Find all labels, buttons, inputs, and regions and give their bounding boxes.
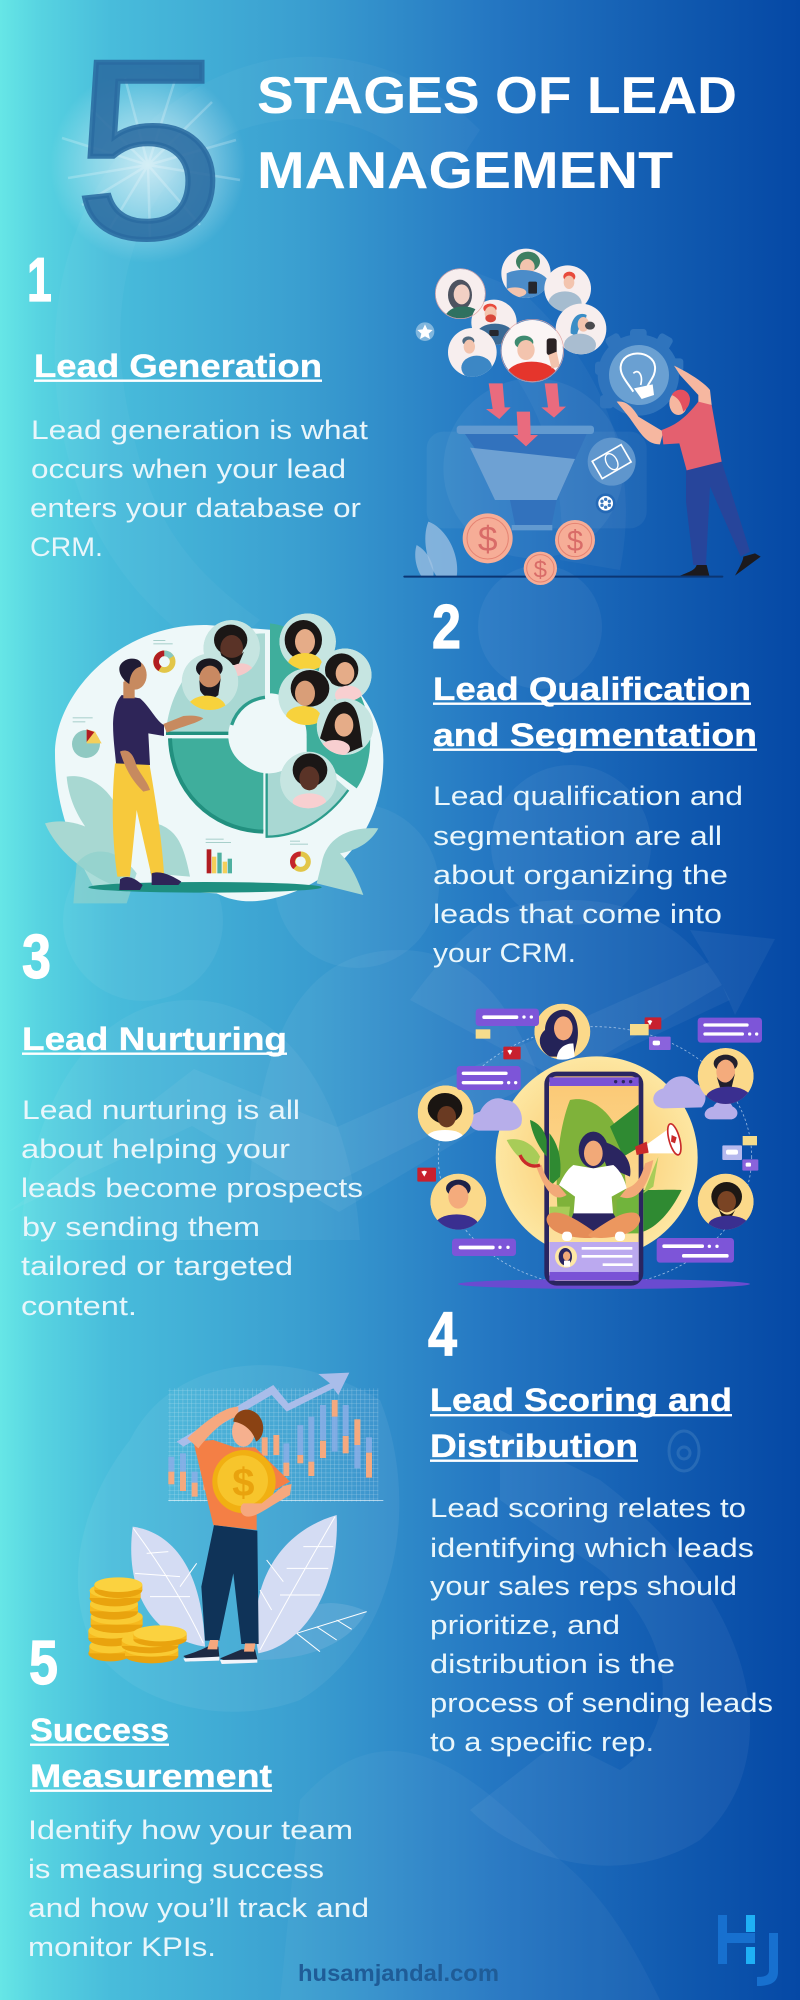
body text 3: about helping your	[21, 1134, 290, 1164]
plant leaves	[131, 1515, 337, 1653]
number 4: 4	[428, 1300, 457, 1369]
body text 1: occurs when your lead	[31, 454, 346, 484]
leaves	[415, 522, 457, 577]
people in pie	[182, 613, 373, 810]
gear and bulb	[595, 329, 683, 416]
footer website: husamjandal.com	[298, 1960, 499, 1986]
lower leaf	[257, 1603, 367, 1660]
body text 2: leads that come into	[433, 899, 722, 929]
man holding coin: $	[232, 1461, 254, 1505]
megaphone and red cord	[520, 1122, 684, 1166]
title: MANAGEMENT	[257, 142, 673, 200]
body text 2: Lead qualification and	[433, 781, 743, 811]
body text 4: Lead scoring relates to	[430, 1493, 746, 1523]
sun circle	[496, 1056, 698, 1258]
heading: lead qualification: and Segmentation	[433, 717, 757, 753]
seated woman	[535, 1132, 653, 1241]
number 3: 3	[22, 923, 51, 992]
film dot badge	[596, 493, 616, 513]
logo: HJ	[718, 1915, 778, 1986]
chart grid	[168, 1388, 383, 1502]
body text 4: distribution is the	[430, 1649, 675, 1679]
body text 4: prioritize, and	[430, 1610, 620, 1640]
presenting man	[113, 659, 203, 890]
heading: success measurement: Measurement	[30, 1758, 272, 1794]
dollar coins: $	[478, 520, 498, 559]
body text 3: content.	[21, 1291, 137, 1321]
number 1: 1	[27, 246, 52, 315]
heading: success measurement	[30, 1712, 272, 1794]
body text 1: CRM.	[30, 532, 103, 562]
title: STAGES OF LEAD	[257, 67, 737, 125]
chat bubbles	[452, 1009, 762, 1263]
title	[257, 67, 737, 200]
section 5: success measurement	[28, 1629, 369, 1962]
dollar coins: $	[534, 556, 547, 583]
heading: lead nurturing: Lead Nurturing	[22, 1021, 287, 1057]
body text 2	[433, 781, 743, 968]
body text 3: Lead nurturing is all	[22, 1095, 300, 1125]
number 5: 5	[29, 1629, 58, 1698]
heading: lead qualification: Lead Qualification	[433, 671, 751, 707]
section 1: lead generation	[27, 246, 369, 562]
white blob	[55, 625, 383, 901]
star badge	[416, 322, 434, 341]
body text 3: tailored or targeted	[21, 1251, 293, 1281]
heading: lead scoring: Lead Scoring and	[430, 1382, 732, 1418]
big number 5 with glow: 5	[74, 7, 224, 291]
body text 5: and how you’ll track and	[28, 1893, 369, 1923]
body text 4: your sales reps should	[430, 1571, 737, 1601]
coin stacks	[88, 1577, 187, 1663]
ground line	[403, 576, 723, 578]
body text 4: identifying which leads	[430, 1533, 754, 1563]
body text 2: segmentation are all	[433, 821, 722, 851]
people circles	[435, 248, 607, 388]
man holding coin	[183, 1407, 292, 1664]
funnel	[457, 426, 594, 530]
body text 3: leads become prospects	[21, 1173, 363, 1203]
ground	[88, 882, 322, 893]
candlesticks	[168, 1400, 372, 1497]
icon: faint threads logo	[669, 1431, 699, 1471]
ground	[458, 1279, 750, 1289]
body text 5: monitor KPIs.	[28, 1932, 216, 1962]
heading: lead scoring: Distribution	[430, 1428, 638, 1464]
pie chart	[166, 623, 370, 837]
body text 4: process of sending leads	[430, 1688, 773, 1718]
body text 1: enters your database or	[30, 493, 361, 523]
body text 3: by sending them	[22, 1212, 260, 1242]
heading: lead scoring	[430, 1382, 732, 1464]
money badge	[588, 438, 636, 486]
body text 5: Identify how your team	[28, 1815, 353, 1845]
body text 4: to a specific rep.	[430, 1727, 654, 1757]
illustration: social phone	[417, 1004, 762, 1289]
illustration: segmentation pie	[45, 613, 383, 903]
heading: lead generation: Lead Generation	[34, 348, 322, 384]
illustration: lead funnel	[403, 248, 761, 585]
body text 2: your CRM.	[433, 938, 576, 968]
small charts	[72, 640, 308, 873]
section 3: lead nurturing	[21, 923, 363, 1321]
body text 5	[28, 1815, 369, 1962]
section 2: lead qualification and segmentation	[432, 593, 757, 968]
leaves	[45, 776, 378, 903]
clouds	[470, 1076, 737, 1131]
number 2: 2	[432, 593, 461, 662]
body text 3	[21, 1095, 363, 1321]
dollar coins	[463, 513, 595, 585]
body text 1	[30, 415, 369, 562]
section 4: lead scoring and distribution	[428, 1300, 773, 1757]
notification icons	[417, 1017, 758, 1182]
heading: success measurement: Success	[30, 1712, 169, 1748]
growth arrow	[177, 1373, 349, 1447]
dotted orbit	[438, 1027, 752, 1287]
heading: lead qualification	[433, 671, 757, 753]
phone	[507, 1074, 682, 1283]
body text 2: about organizing the	[433, 860, 728, 890]
body text 5: is measuring success	[28, 1854, 324, 1884]
dollar coins: $	[567, 525, 583, 558]
body text 1: Lead generation is what	[31, 415, 369, 445]
body text 4	[430, 1493, 773, 1757]
illustration: success man	[88, 1373, 383, 1664]
person pushing bulb	[617, 366, 761, 576]
profile circles	[418, 1004, 754, 1236]
red arrows	[486, 383, 566, 446]
